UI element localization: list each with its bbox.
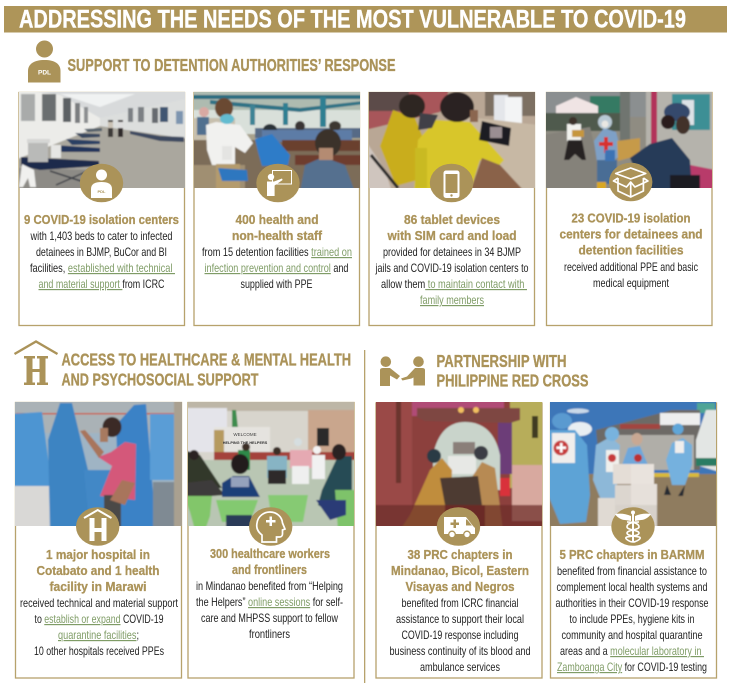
card text: facility in Marawi xyxy=(50,579,146,594)
card: isolation centers xyxy=(15,88,189,326)
card: health staff xyxy=(190,88,364,326)
card text: with SIM card and load xyxy=(387,228,516,243)
card text xyxy=(20,547,179,658)
card text xyxy=(556,547,709,674)
card text: allow them to maintain contact with xyxy=(381,277,527,291)
photo: group session xyxy=(188,402,354,526)
card text: provided for detainees in 34 BJMP xyxy=(383,245,521,259)
card text: areas and a molecular laboratory in xyxy=(560,644,704,658)
card: healthcare workers xyxy=(184,398,358,678)
card text xyxy=(390,547,530,674)
icon badge: hospital xyxy=(76,507,119,546)
card text: Visayas and Negros xyxy=(406,579,514,594)
section heading: ACCESS TO HEALTHCARE & MENTAL HEALTH xyxy=(62,350,351,370)
card text xyxy=(202,212,352,291)
card text: jails and COVID-19 isolation centers to xyxy=(375,261,529,275)
section: healthcare and mental health xyxy=(14,341,352,389)
card text: 9 COVID-19 isolation centers xyxy=(24,212,179,227)
card text: 10 other hospitals received PPEs xyxy=(34,644,164,658)
card text: 86 tablet devices xyxy=(404,212,500,227)
photo: ambulance xyxy=(376,402,542,526)
icon badge: tablet xyxy=(430,164,473,202)
icon badge: caduceus xyxy=(611,507,655,546)
card text: Mindanao, Bicol, Eastern xyxy=(391,563,529,578)
card: PRC chapters xyxy=(372,398,546,678)
card text: 5 PRC chapters in BARMM xyxy=(560,547,705,562)
section: support to detention authorities xyxy=(28,40,396,83)
card text: with 1,403 beds to cater to infected xyxy=(30,229,173,243)
card text: detainees in BJMP, BuCor and BI xyxy=(36,245,167,259)
card text: business continuity of its blood and xyxy=(390,644,530,658)
icon badge: PDL: PDL xyxy=(98,189,106,194)
card text: the Helpers” online sessions for self- xyxy=(196,595,343,609)
card: tablet devices xyxy=(365,88,539,326)
banner text xyxy=(223,433,268,444)
photo: isolation ward xyxy=(19,92,185,188)
card text xyxy=(196,546,343,641)
icon: hospital house xyxy=(14,342,58,385)
card text xyxy=(24,212,179,291)
card text: from 15 detention facilities trained on xyxy=(202,245,352,259)
section heading xyxy=(62,350,351,389)
card text: frontliners xyxy=(249,627,290,641)
section heading: PHILIPPINE RED CROSS xyxy=(436,371,588,391)
card text: Cotabato and 1 health xyxy=(36,563,160,578)
section heading: PARTNERSHIP WITH xyxy=(436,351,566,371)
card text: family members xyxy=(420,293,484,307)
card text xyxy=(560,211,702,290)
icon badge: trainer at board xyxy=(256,164,300,202)
photo: supply handover xyxy=(546,92,712,188)
card text: benefited from ICRC financial xyxy=(402,596,518,610)
card text: Zamboanga City for COVID-19 testing xyxy=(557,660,707,674)
card text: medical equipment xyxy=(593,276,670,290)
section heading: AND PSYCHOSOCIAL SUPPORT xyxy=(62,369,259,389)
card text: COVID-19 response including xyxy=(402,628,518,642)
card: BARMM chapters xyxy=(546,398,720,678)
card text: and frontliners xyxy=(232,562,307,577)
card text: to include PPEs, hygiene kits in xyxy=(570,612,694,626)
section heading xyxy=(436,351,588,391)
card text: assistance to support their local xyxy=(396,612,524,626)
icon: PDL person: PDL xyxy=(38,70,51,76)
card text: non-health staff xyxy=(232,228,323,243)
card text: in Mindanao benefited from “Helping xyxy=(196,579,343,593)
icon badge: head with plus xyxy=(249,507,292,546)
card text: 1 major hospital in xyxy=(46,547,150,562)
banner text: HELPING THE HELPERS xyxy=(223,441,268,445)
vertical section divider xyxy=(364,350,365,683)
card text: 38 PRC chapters in xyxy=(408,547,512,562)
card text: centers for detainees and xyxy=(560,227,702,242)
icon badge: PDL xyxy=(80,164,123,202)
card text: care and MHPSS support to fellow xyxy=(201,611,338,625)
card text: detention facilities xyxy=(578,243,684,258)
card text: infection prevention and control and xyxy=(204,261,348,275)
card text: facilities, established with technical xyxy=(30,261,175,275)
icon badge: open box xyxy=(609,163,652,201)
card text: quarantine facilities; xyxy=(58,628,139,642)
photo: staff training xyxy=(194,92,360,188)
card text: 23 COVID-19 isolation xyxy=(572,211,690,226)
photo: Red Cross staff with boxes xyxy=(550,402,716,526)
photo: detainees with tablets xyxy=(369,92,535,188)
section: partnership with Philippine Red Cross xyxy=(380,351,589,391)
card text xyxy=(375,212,529,307)
card text: supplied with PPE xyxy=(240,277,313,291)
icon: PDL person xyxy=(28,40,60,82)
banner text: WELCOME xyxy=(233,432,257,437)
card text: and material support from ICRC xyxy=(38,277,165,291)
section heading: SUPPORT TO DETENTION AUTHORITIES’ RESPONSE xyxy=(68,55,396,75)
icon: handshake xyxy=(380,356,425,386)
card text: to establish or expand COVID-19 xyxy=(34,612,164,626)
card: isolation centers for detainees xyxy=(542,88,716,326)
icon badge: ambulance xyxy=(437,507,480,546)
photo: hospital curtains xyxy=(15,402,182,526)
card text: ambulance services xyxy=(420,660,500,674)
card text: 400 health and xyxy=(236,212,318,227)
card: hospitals xyxy=(11,398,186,678)
card text: received technical and material support xyxy=(20,596,179,610)
card text: 300 healthcare workers xyxy=(210,546,330,561)
